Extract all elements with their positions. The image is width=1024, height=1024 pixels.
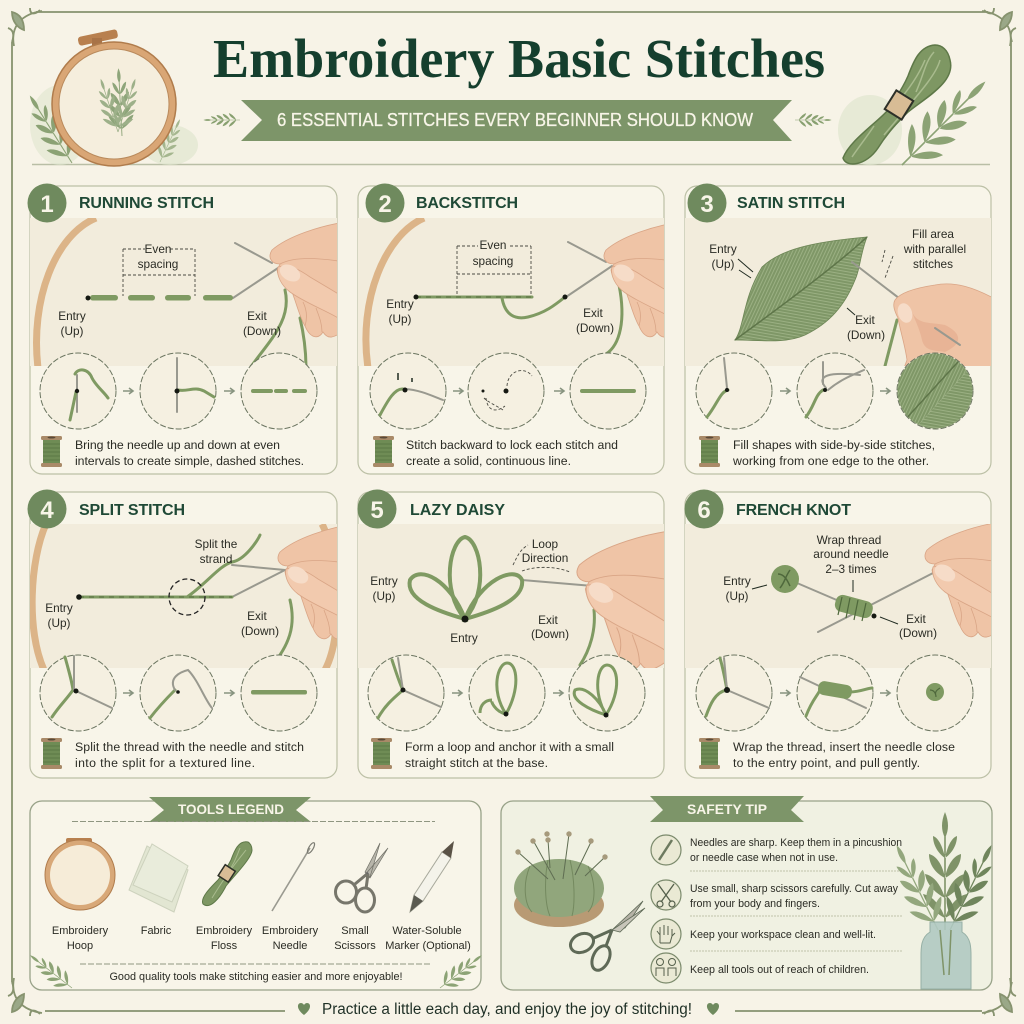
subtitle ribbon [241,100,792,141]
corner flourish: top right [982,8,1016,46]
label: split the strand: Split the [195,537,238,551]
description: straight stitch at the base. [405,756,548,770]
label: exit: (Down) [241,624,279,638]
heading: 1 [40,191,54,218]
illustration: backstitch [366,218,679,368]
heading: 6 [697,497,711,524]
text: scissors: from your body and fingers. [690,898,820,910]
description: intervals to create simple, dashed stitches. [75,454,304,468]
icon: hand safety [651,919,681,949]
illustration: running stitch [37,218,345,368]
corner flourish: bottom right [982,978,1016,1016]
tool: fabric [129,844,188,937]
label: split the strand: strand [200,552,232,566]
panel: split stitch [28,490,353,778]
tool: floss: Embroidery [196,925,253,937]
sprig: bottom right [434,948,488,996]
tool: hoop: Hoop [67,940,93,952]
ribbon heading: SAFETY TIP [687,801,767,817]
panel: tools legend [24,797,488,996]
label: exit: Exit [247,609,268,623]
icon: embroidery floss skein with leaves [838,45,1001,181]
heading [366,184,518,222]
label: fill area: Fill area [912,227,954,241]
tool: needle: Needle [273,940,307,952]
ribbon heading: TOOLS LEGEND [178,801,284,817]
panel: lazy daisy [358,490,667,778]
tool: floss [196,842,253,952]
tool: scissors [334,843,388,952]
description: create a solid, continuous line. [406,454,571,468]
label: wrap thread: around needle [813,547,889,561]
label: entry: (Up) [389,312,412,326]
heading [28,490,185,528]
heading: FRENCH KNOT [736,502,851,519]
label: entry top: (Up) [373,589,396,603]
label: exit: Exit [247,309,268,323]
caption: Good quality tools make stitching easier and more enjoyable! [110,971,402,983]
heading [684,490,851,528]
description: Bring the needle up and down at even [75,438,280,452]
tool: scissors: Scissors [334,940,376,952]
petals [410,537,522,619]
heading: 4 [40,497,54,524]
ribbon heading [149,797,311,822]
description: Form a loop and anchor it with a small [405,740,614,754]
heading: 2 [378,191,392,218]
label: entry bottom: Entry [450,631,478,645]
label: entry: Entry [723,574,751,588]
label: wrap thread: Wrap thread [817,533,881,547]
step circles [696,352,974,430]
tool: needle: Embroidery [262,925,319,937]
tool: fabric: Fabric [141,925,172,937]
label: entry: (Up) [61,324,84,338]
icon: scissors safety [651,880,681,910]
label: exit: Exit [583,306,604,320]
icon: spool [371,738,392,769]
tool: marker: Water-Soluble [392,925,462,937]
label: loop direction: Direction [522,551,568,565]
icon: right ribbon sprig [795,113,832,127]
illustration: vase with plant [881,812,1007,989]
description: Wrap the thread, insert the needle close [733,740,955,754]
text: children: Keep all tools out of reach of children. [690,964,869,976]
corner flourish: top left [8,8,42,46]
label: even spacing: spacing [138,257,178,271]
label: exit: (Down) [243,324,281,338]
corner flourish: bottom left [8,978,42,1016]
label: loop direction: Loop [532,537,559,551]
label: entry: (Up) [48,616,71,630]
title: Embroidery Basic Stitches [213,28,825,89]
sprig: bottom left [24,948,78,996]
illustration: french knot [771,522,1000,637]
heading [28,184,214,222]
label: entry: Entry [58,309,86,323]
footer message: Practice a little each day, and enjoy the joy of stitching! [322,1001,692,1018]
panel: satin stitch [685,184,995,474]
icon: spool [699,738,720,769]
description: Split the thread with the needle and stitch [75,740,304,754]
illustration: satin stitch [735,237,995,368]
label: exit: (Down) [899,626,937,640]
panel: backstitch [358,184,679,474]
text: needles: or needle case when not in use. [690,852,838,864]
heading: 5 [370,497,384,524]
label: exit: (Down) [847,328,885,342]
step circles [40,655,317,731]
label: even spacing: Even [145,242,171,256]
illustration: lazy daisy [410,531,667,670]
icon: left ribbon sprig [203,113,240,127]
step circles [696,655,973,731]
heading: BACKSTITCH [416,195,518,212]
icon: spool [41,738,62,769]
icon: children safety [651,953,681,983]
label: entry top: Entry [370,574,398,588]
panel: french knot [684,490,1000,778]
header divider [32,164,990,166]
label: entry: Entry [386,297,414,311]
tool: marker [385,841,471,952]
ribbon heading [650,796,804,822]
text: needles: Needles are sharp. Keep them in a pincushion [690,837,902,849]
description: Stitch backward to lock each stitch and [406,438,618,452]
label: exit: Exit [906,612,927,626]
heading: RUNNING STITCH [79,195,214,212]
tool: floss: Floss [211,940,238,952]
label: exit: Exit [538,613,559,627]
panel: safety tip [501,796,1007,990]
label: fill area: stitches [913,257,953,271]
tool: hoop: Embroidery [52,925,109,937]
description: working from one edge to the other. [732,454,929,468]
heading: SPLIT STITCH [79,502,185,519]
icon: needle safety [651,835,681,865]
description: Fill shapes with side-by-side stitches, [733,438,935,452]
label: entry: Entry [45,601,73,615]
heading: LAZY DAISY [410,502,505,519]
icon: embroidery hoop with sprig [17,29,198,171]
heading [688,184,845,222]
tool: hoop [45,838,115,952]
subtitle ribbon: 6 ESSENTIAL STITCHES EVERY BEGINNER SHOULD KNOW [277,110,753,130]
text: workspace: Keep your workspace clean and well-lit. [690,929,876,941]
tool: scissors: Small [341,925,369,937]
label: entry: Entry [709,242,737,256]
tool: needle [262,842,319,952]
label: even spacing: spacing [473,254,513,268]
description: to the entry point, and pull gently. [733,756,920,770]
illustration: split stitch [32,524,353,670]
label: entry: (Up) [726,589,749,603]
step circles [368,655,645,731]
heading: 3 [700,191,714,218]
illustration: scissors [567,901,645,973]
label: fill area: with parallel [903,242,966,256]
heading [358,490,505,528]
text: scissors: Use small, sharp scissors carefully. Cut away [690,883,899,895]
step circles [370,353,646,429]
leaf [735,237,867,341]
label: exit: (Down) [531,627,569,641]
label: entry: (Up) [712,257,735,271]
panel: running stitch [28,184,345,474]
loop arrow [513,545,570,572]
label: even spacing: Even [480,238,506,252]
label: exit: (Down) [576,321,614,335]
icon: spool [373,436,394,467]
heading: SATIN STITCH [737,195,845,212]
illustration: pincushion [514,831,608,927]
description: into the split for a textured line. [75,756,255,770]
arrows [752,580,898,624]
label: exit: Exit [855,313,876,327]
icon: spool [41,436,62,467]
tool: marker: Marker (Optional) [385,940,471,952]
step circles [40,353,317,429]
label: wrap thread: 2–3 times [825,562,877,576]
icon: spool [699,436,720,467]
entry and exit arrows [738,259,855,315]
